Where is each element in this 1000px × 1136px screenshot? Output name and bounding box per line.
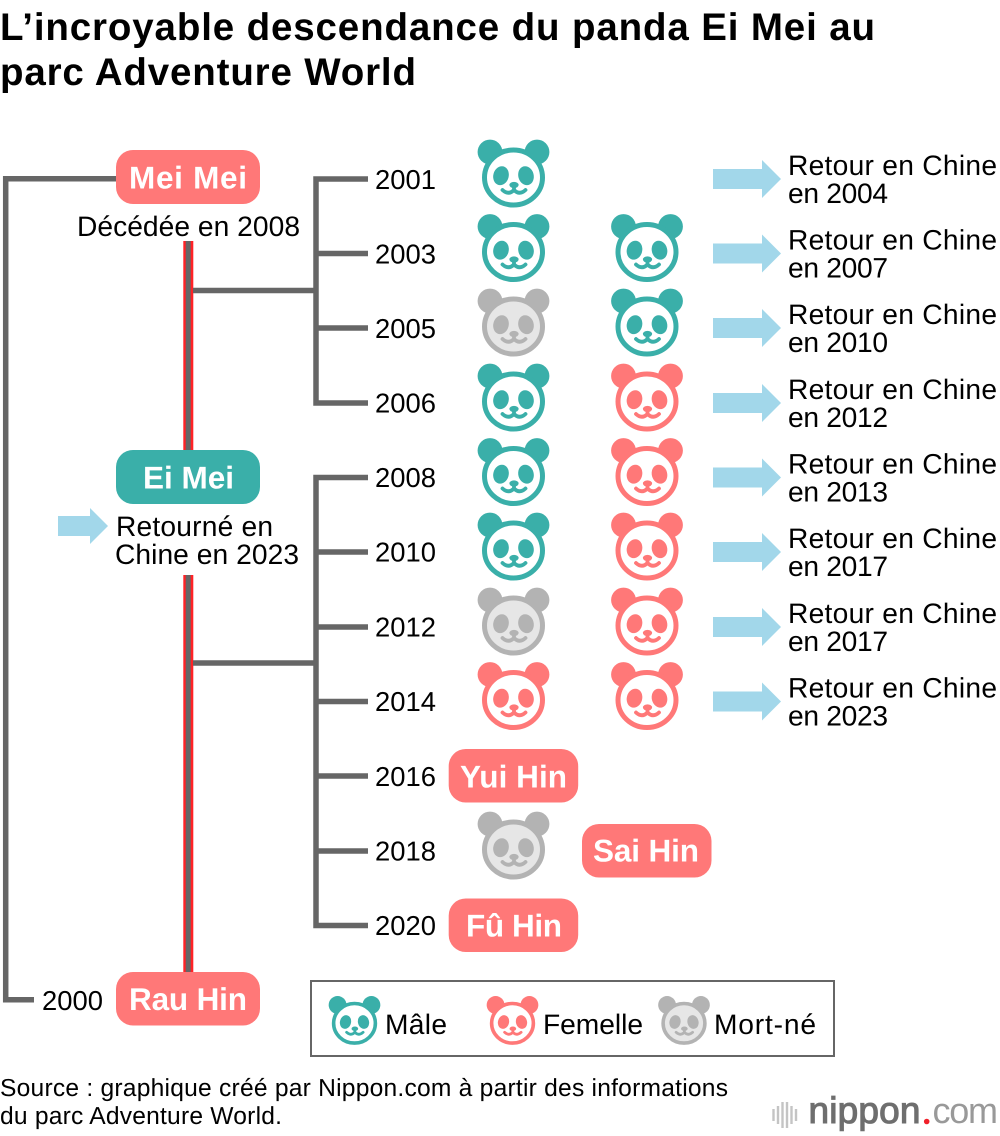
text: Retourné en Chine en 2023 [115,510,299,570]
arrow and return note 2012: Retour en Chine [788,373,997,405]
arrow and return note 2004: Retour en Chine [788,149,997,181]
arrow and return note 2017 second [713,597,997,657]
row 2008: 2008 [375,462,436,493]
text: Retourné en Chine en 2023: Chine en 2023 [115,538,299,570]
arrow: Ei Mei return [58,508,108,544]
year 2000: 2000 [42,985,103,1016]
pill: Sai Hin: Sai Hin [593,833,699,869]
source note [0,1075,728,1130]
arrow and return note 2017 second: Retour en Chine [788,597,997,629]
legend [311,981,834,1056]
arrow and return note 2023: Retour en Chine [788,672,997,704]
pill: Rau Hin: Rau Hin [129,981,247,1017]
arrow and return note 2004 [713,149,997,209]
row 2010: 2010 [375,536,436,568]
legend: female [487,996,643,1043]
row 2018 [375,812,712,878]
arrow and return note 2007: Retour en Chine [788,224,997,256]
arrow and return note 2017 second: en 2017 [788,625,888,657]
pill: Yui Hin [449,749,578,802]
arrow and return note 2012: en 2012 [788,401,888,433]
row 2001: 2001 [375,164,436,195]
title [0,6,875,94]
row 2020: 2020 [375,910,436,941]
pill: Fû Hin [449,898,578,952]
stem: Mei Mei to Ei Mei [183,241,193,450]
pill: Fû Hin: Fû Hin [466,908,562,944]
arrow and return note 2023 [713,672,997,732]
logo: nippon.com: com [932,1090,998,1131]
row 2012 [375,588,997,657]
tree connector: litters 2008 to 2020 [193,478,368,926]
arrow and return note 2017: Retour en Chine [788,522,997,554]
row 2012: 2012 [375,612,436,642]
pill: Mei Mei [116,150,260,204]
row 2001 [375,140,997,209]
row 2020 [375,898,578,952]
row 2016: 2016 [375,761,436,792]
row 2005: 2005 [375,313,436,344]
stem: Ei Mei to Rau Hin [183,575,193,972]
arrow and return note 2004: en 2004 [788,177,888,209]
source note: du parc Adventure World. [0,1103,282,1130]
connector: parents to Rau Hin [6,179,116,1000]
pill: Sai Hin [582,824,712,878]
arrow and return note 2013: Retour en Chine [788,448,997,480]
tree connector: litters 2001 to 2006 [193,179,368,403]
row 2014 [375,662,997,732]
legend: stillborn: Mort-né [714,1008,816,1040]
row 2016 [375,749,578,802]
arrow and return note 2012 [713,373,997,433]
legend: stillborn [658,996,816,1043]
arrow and return note 2007: en 2007 [788,252,888,284]
text: Décédée en 2008: Décédée en 2008 [77,210,300,242]
row 2014: 2014 [375,686,436,717]
arrow and return note 2013 [713,448,997,508]
legend: male [329,996,447,1043]
row 2018: 2018 [375,836,436,866]
source note: Source : graphique créé par Nippon.com à partir des informations [0,1075,728,1102]
legend: male: Mâle [385,1008,447,1040]
arrow and return note 2007 [713,224,997,284]
row 2003 [375,214,997,284]
pill: Rau Hin [116,972,260,1026]
row 2010 [375,513,997,582]
arrow and return note 2017 [713,522,997,582]
pill: Mei Mei: Mei Mei [129,160,247,196]
arrow and return note 2010: en 2010 [788,326,888,358]
title: L’incroyable descendance du panda Ei Mei au [0,6,875,49]
pill: Ei Mei [116,450,260,504]
row 2006: 2006 [375,388,436,418]
logo: nippon.com [774,1090,998,1131]
text: Retourné en Chine en 2023: Retourné en [116,510,273,542]
arrow and return note 2010: Retour en Chine [788,298,997,330]
arrow and return note 2010 [713,298,997,358]
arrow and return note 2023: en 2023 [788,700,888,732]
legend: female: Femelle [543,1008,643,1040]
title: parc Adventure World [0,51,416,94]
pill: Ei Mei: Ei Mei [143,460,234,496]
pill: Yui Hin: Yui Hin [460,759,567,795]
row 2008 [375,438,997,508]
row 2006 [375,364,997,433]
arrow and return note 2017: en 2017 [788,550,888,582]
row 2003: 2003 [375,238,436,270]
arrow and return note 2013: en 2013 [788,476,888,508]
row 2005 [375,289,997,358]
logo: nippon.com: nippon [808,1090,920,1131]
